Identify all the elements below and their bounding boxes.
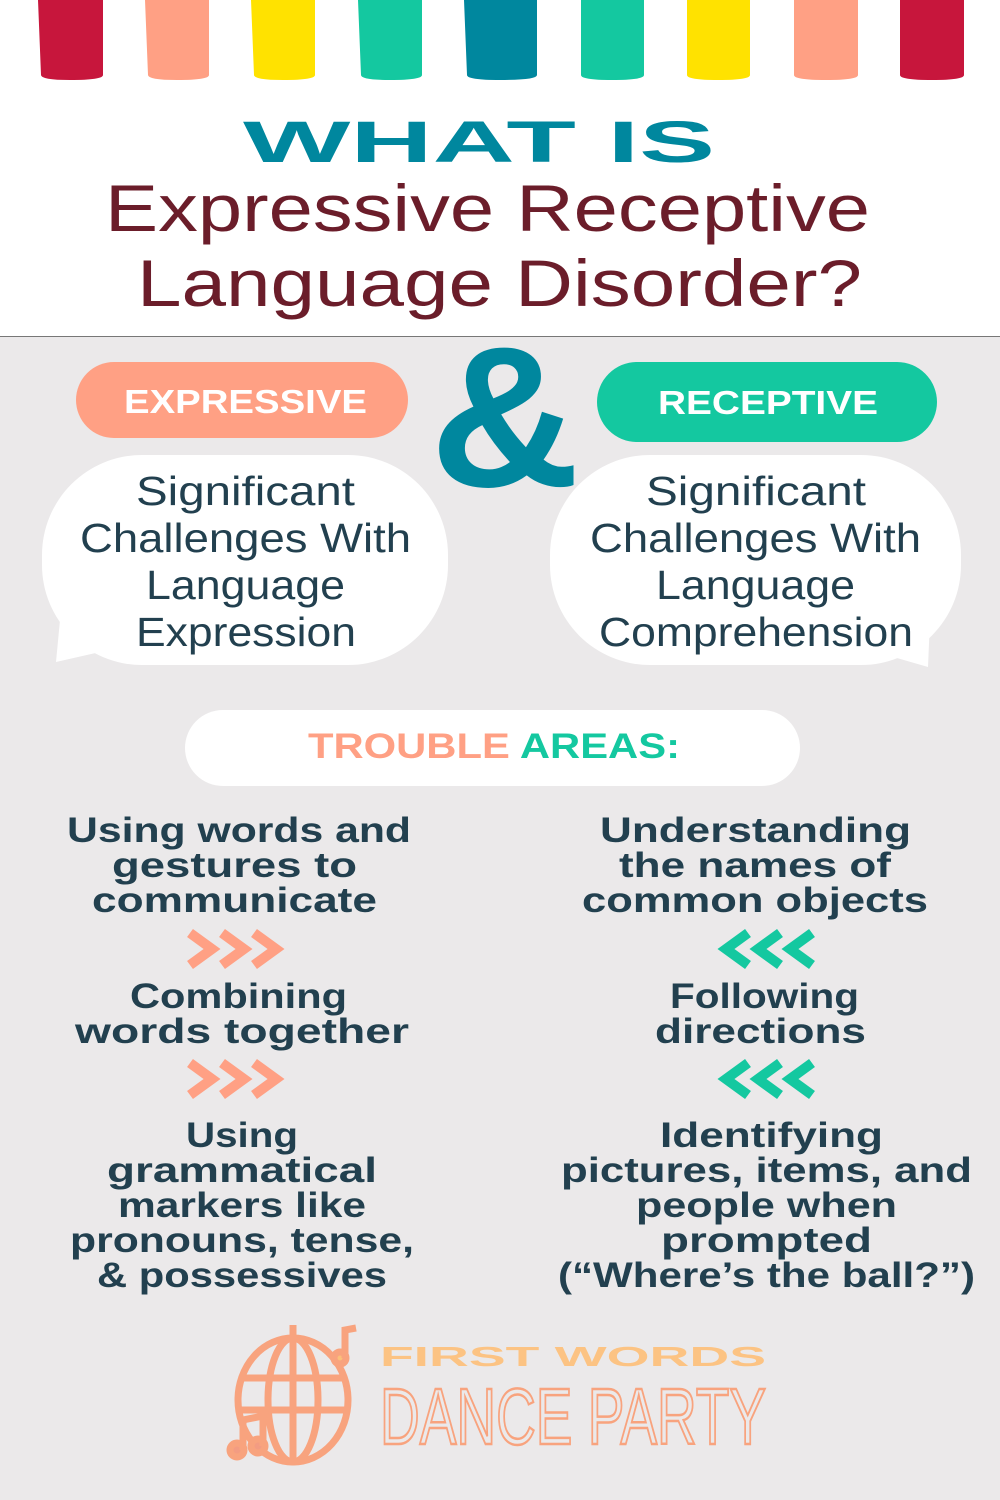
receptive trouble list: common objects <box>582 881 928 920</box>
pill: receptive: RECEPTIVE <box>658 384 878 421</box>
trouble areas heading <box>185 710 800 786</box>
arrows: expressive chevrons <box>190 933 276 1095</box>
title: main heading: Expressive Receptive <box>105 171 870 245</box>
expressive trouble list: Combining <box>130 977 347 1016</box>
receptive trouble list: (“Where’s the ball?”) <box>558 1256 975 1295</box>
ampersand: & <box>430 306 580 529</box>
title: main heading: Language Disorder? <box>137 246 862 320</box>
bubble: receptive definition: Significant <box>646 468 867 514</box>
receptive trouble list: Following <box>670 977 859 1016</box>
bubble: expressive definition: Significant <box>136 468 356 514</box>
title: main heading <box>105 171 870 320</box>
expressive trouble list <box>67 811 414 1295</box>
expressive trouble list: communicate <box>92 881 377 920</box>
pill: receptive <box>597 362 937 442</box>
text: DANCE PARTY: DANCE PARTY <box>380 1372 766 1461</box>
title: WHAT IS: WHAT IS <box>243 110 715 175</box>
receptive trouble list: Identifying <box>660 1116 883 1155</box>
bubble: receptive definition <box>550 455 961 667</box>
expressive trouble list: gestures to <box>112 846 357 885</box>
bubble: expressive definition: Challenges With <box>80 515 411 561</box>
receptive trouble list: the names of <box>619 846 891 885</box>
logo: First Words Dance Party <box>230 1325 766 1462</box>
trouble areas heading: TROUBLE AREAS: <box>308 727 680 766</box>
bubble: receptive definition: Challenges With <box>590 515 921 561</box>
expressive trouble list: markers like <box>118 1186 366 1225</box>
bubble: expressive definition: Expression <box>136 609 356 655</box>
receptive trouble list: pictures, items, and <box>561 1151 972 1190</box>
expressive trouble list: & possessives <box>97 1256 387 1295</box>
decorative top bars <box>38 0 964 80</box>
expressive trouble list: Using <box>186 1116 298 1155</box>
bubble: expressive definition <box>42 455 448 665</box>
expressive trouble list: Using words and <box>67 811 411 850</box>
expressive trouble list: grammatical <box>107 1151 377 1190</box>
expressive trouble list: words together <box>74 1012 409 1051</box>
icon: disco ball <box>230 1325 356 1462</box>
pill: expressive: EXPRESSIVE <box>124 383 367 420</box>
receptive trouble list: Understanding <box>600 811 911 850</box>
expressive trouble list: pronouns, tense, <box>70 1221 414 1260</box>
receptive trouble list: directions <box>655 1012 866 1051</box>
receptive trouble list: people when <box>636 1186 897 1225</box>
receptive trouble list <box>558 811 975 1295</box>
bubble: receptive definition: Language <box>656 562 855 608</box>
bubble: expressive definition: Language <box>146 562 345 608</box>
receptive trouble list: prompted <box>661 1221 872 1260</box>
bubble: receptive definition: Comprehension <box>599 609 913 655</box>
arrows: receptive chevrons <box>726 933 812 1095</box>
pill: expressive <box>76 362 408 438</box>
text: FIRST WORDS: FIRST WORDS <box>380 1341 766 1372</box>
